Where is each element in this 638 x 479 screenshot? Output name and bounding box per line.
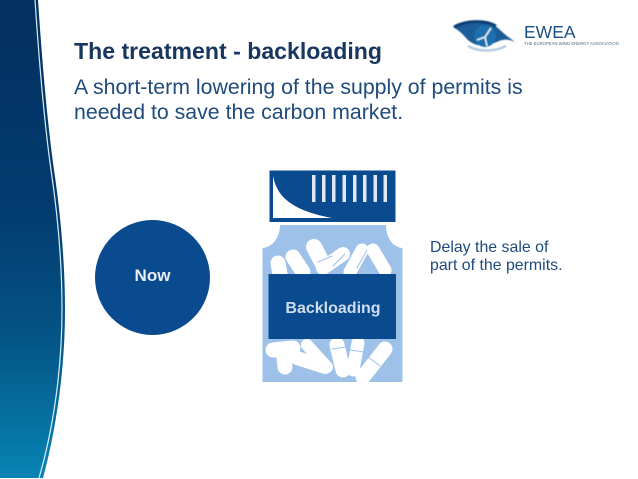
pills bottom (273, 343, 385, 377)
annotation text: Delay the sale of (430, 239, 548, 256)
annotation text: part of the permits. (430, 257, 562, 274)
bottle label text: Backloading (285, 300, 381, 317)
annotation text (430, 239, 562, 274)
bottle label (268, 274, 396, 339)
bottle: Backloading (262, 170, 402, 382)
logo: EWEA (452, 19, 619, 52)
circle: Now (95, 220, 210, 335)
bottle body (262, 225, 402, 382)
subtitle text: needed to save the carbon market. (74, 100, 403, 124)
subtitle text (74, 75, 523, 124)
circle: Now: Now (135, 266, 170, 285)
logo wordmark: EWEA (524, 22, 576, 42)
title: The treatment - backloading (74, 38, 382, 64)
pills top (278, 247, 385, 274)
bottle lid (270, 170, 396, 222)
subtitle text: A short-term lowering of the supply of permits is (74, 75, 523, 99)
logo tagline: THE EUROPEAN WIND ENERGY ASSOCIATION (524, 41, 619, 46)
icon: eye with turbine (452, 19, 515, 52)
